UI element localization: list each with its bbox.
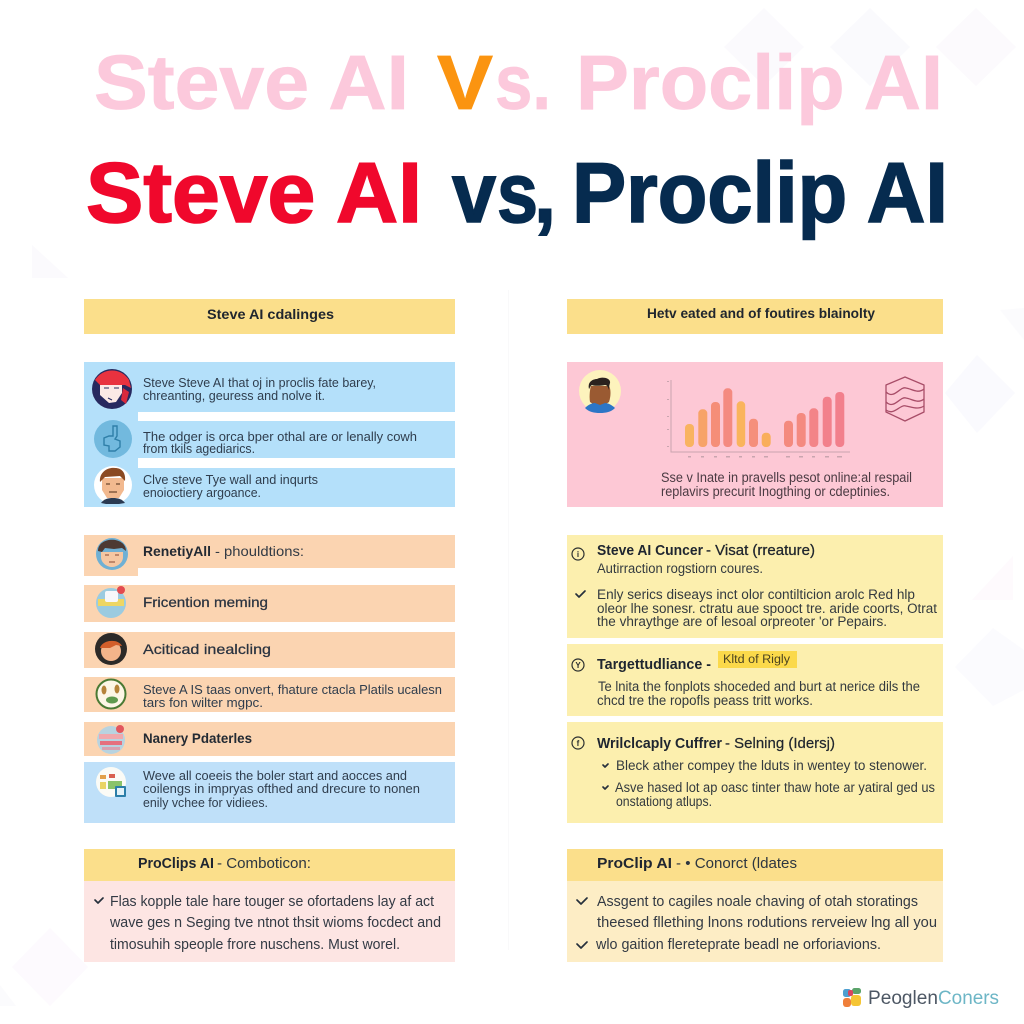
icon: green ring: [96, 680, 126, 708]
icon: circled mark: f: [577, 739, 580, 748]
heading: - • Conorct (ldates: [676, 856, 797, 872]
title: main red and navy line: Proclip AI: [572, 146, 948, 241]
text: body: [597, 894, 937, 931]
panel: ProClips combination: [84, 849, 455, 962]
text: body: oleor lhe sonesr. ctratu aue spooct tre. aride coorts, Otrat: [597, 601, 937, 616]
text: body: Assgent to cagiles noale chaving of otah storatings: [597, 894, 918, 910]
callout: highlighted tag: [718, 651, 797, 668]
text: body: theesed fllething lnons rodutions rerveiew lng all you: [597, 915, 937, 931]
text: row label: Fricention meming: [143, 594, 268, 610]
heading: - Comboticon:: [217, 856, 311, 872]
panel: yellow feature three: [567, 722, 943, 823]
text: caption: [661, 470, 912, 499]
heading: - Selning (Idersj): [725, 736, 835, 752]
text: row three: [143, 472, 318, 500]
text: row one: Steve Steve AI that oj in proclis fate barey,: [143, 375, 376, 390]
text: last line: wlo gaition flereteprate beadl ne orforiavions.: [595, 937, 881, 953]
icon: avatar young man: [94, 466, 132, 504]
text: body: wave ges n Seging tve ntnot thsit wioms focdect and: [109, 915, 441, 931]
text: caption: Sse v Inate in pravells pesot online:al respail: [661, 470, 912, 485]
title: main red and navy line: v: [452, 146, 496, 241]
text: body: timosuhih speople frore nuschens. Must worel.: [110, 937, 400, 953]
text: row body: Steve A IS taas onvert, fhature ctacla Platils ucalesn: [143, 682, 442, 697]
text: row label: Nanery Pdaterles: [143, 730, 252, 746]
heading: Wrilclcaply Cuffrer: [597, 736, 722, 752]
title: main red and navy line: ,: [534, 146, 556, 241]
title: main red and navy line: [86, 146, 948, 241]
text: bullet one: Bleck ather compey the lduts in wentey to stenower.: [616, 758, 927, 773]
text: row one: chreanting, geuress and nolve it.: [143, 388, 325, 403]
panel: left blue challenges: [84, 362, 455, 507]
icon: face on blue: [96, 538, 128, 570]
icon: video tiles: [96, 767, 126, 797]
text: row heading: [143, 543, 304, 559]
title: main red and navy line: s: [497, 146, 538, 241]
text: row two: The odger is orca bper othal are or lenally cowh: [143, 429, 417, 444]
heading: Steve AI Cuncer: [597, 543, 703, 559]
text: row one: [143, 375, 376, 403]
heading: ProClip AI: [597, 856, 672, 872]
text: row three: Clve steve Tye wall and inqurts: [143, 472, 318, 487]
panel: light blue note: [84, 762, 455, 823]
text: body: Flas kopple tale hare touger se ofortadens lay af act: [110, 894, 434, 910]
text: row three: enoioctiery argoance.: [143, 485, 261, 500]
icon: layered waves: [886, 377, 924, 421]
text: row body: [143, 682, 442, 710]
title: main red and navy line: Steve AI: [86, 146, 422, 241]
title: faded pink line: [94, 40, 943, 126]
text: caption: replavirs precurit Inogthing or cdeptinies.: [661, 484, 890, 499]
heading: Targettudliance -: [597, 657, 711, 673]
title: faded pink line: V: [437, 40, 493, 126]
icon: check: [603, 764, 608, 767]
text: note body: enily vchee for vidiees.: [143, 795, 268, 810]
logo: PeoglenConers: [843, 988, 999, 1009]
icon: check: [603, 786, 608, 789]
text: body: [109, 894, 441, 953]
text: row two: from tkils agediarics.: [143, 441, 255, 456]
icon: avatar orange hair: [95, 633, 127, 665]
text: note body: Weve all coeeis the boler start and aocces and: [143, 768, 407, 783]
panel: right heading: Hetv eated and of foutires blainolty: [647, 305, 875, 321]
text: row body: tars fon wilter mgpc.: [143, 695, 263, 710]
icon: circled mark: [572, 659, 584, 671]
text: bullet two: Asve hased lot ap oasc tinter thaw hote ar yatiral ged us: [615, 780, 935, 795]
title: faded pink line: Steve AI: [94, 40, 409, 126]
heading: - Visat (rreature): [706, 543, 815, 559]
icon: check: [577, 898, 587, 904]
text: body: Enly serics diseays inct olor contilticion arolc Red hlp: [597, 587, 915, 602]
heading: [138, 856, 311, 872]
icon: avatar dark hair: [579, 370, 621, 413]
heading: [597, 856, 797, 872]
text: note body: coilengs in impryas ofthed and drecure to nonen: [143, 781, 420, 796]
panel: peach row four: [84, 677, 455, 712]
logo: PeoglenConers: Coners: [938, 988, 999, 1009]
bar chart: [667, 380, 850, 458]
panel: peach row three: [84, 632, 455, 668]
panel: ProClip updates: [567, 849, 943, 962]
panel: yellow target audience: [567, 644, 943, 716]
panel: pink chart: [567, 362, 943, 507]
icon: blue hand: [94, 420, 132, 458]
text: body: [597, 587, 937, 629]
icon: document badge: [96, 586, 126, 618]
text: body: Te lnita the fonplots shoceded and burt at nerice dils the: [598, 679, 920, 694]
text: body: chcd tre the ropofls peass tritt works.: [597, 693, 813, 708]
heading: [597, 543, 815, 559]
text: row two: [143, 429, 417, 456]
panel: peach row five: [84, 722, 455, 756]
title: faded pink line: Proclip AI: [576, 40, 943, 126]
text: body: [597, 679, 920, 708]
text: body: the vhraythge are of lesoal orpreoter 'or Pepairs.: [597, 614, 887, 629]
title: faded pink line: s.: [495, 40, 551, 126]
panel: peach row two: [84, 585, 455, 622]
icon: stacked card badge: [97, 725, 125, 754]
panel: left heading: Steve AI cdalinges: [207, 306, 334, 322]
heading: ProClips AI: [138, 856, 214, 872]
icon: circled mark: i: [577, 550, 579, 559]
text: bullet two: onstationg atlups.: [616, 794, 712, 809]
text: bullet two: [615, 780, 935, 809]
panel: yellow feature one: [567, 535, 943, 638]
callout: highlighted tag: Kltd of Rigly: [723, 654, 790, 666]
icon: circled mark: [572, 548, 584, 560]
text: row heading: RenetiyAll: [143, 543, 211, 559]
icon: circled mark: Y: [575, 661, 581, 670]
logo: PeoglenConers: Peoglen: [868, 988, 938, 1009]
icon: circled mark: [572, 737, 584, 749]
icon: check: [577, 942, 587, 948]
panel: peach row one: [84, 535, 455, 576]
text: subtitle: Autirraction rogstiorn coures.: [597, 561, 763, 576]
text: row heading: - phouldtions:: [215, 543, 304, 559]
icon: avatar red cap: [92, 369, 132, 409]
heading: [597, 736, 835, 752]
panel: right heading: [567, 299, 943, 334]
panel: left heading: [84, 299, 455, 334]
text: note body: [143, 768, 420, 810]
icon: check: [95, 898, 103, 903]
text: row label: Aciticad inealcling: [143, 641, 271, 657]
icon: check: [576, 591, 585, 597]
